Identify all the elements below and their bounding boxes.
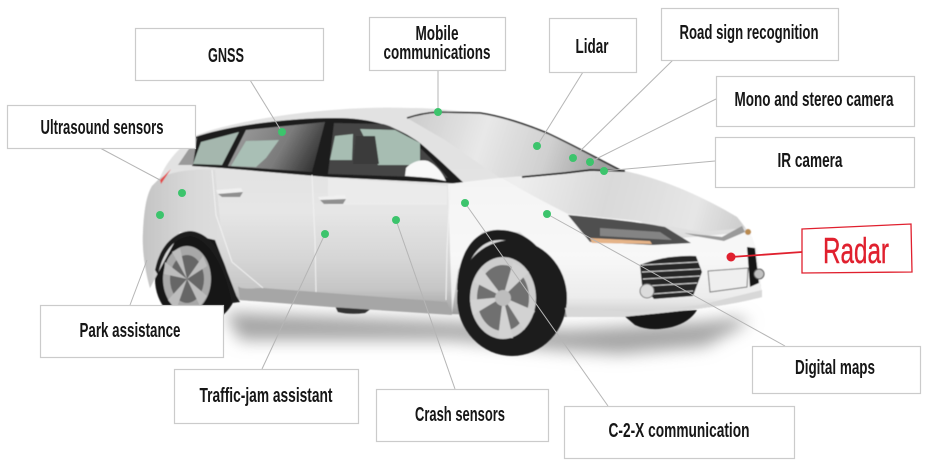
label: Mono and stereo camera (716, 76, 914, 126)
car illustration (143, 108, 764, 356)
front wheel (457, 240, 567, 356)
label: Mobile communications: Mobile (416, 22, 458, 45)
label: Ultrasound sensors: Ultrasound sensors (40, 116, 164, 139)
label: Digital maps (752, 346, 920, 394)
nose trim (684, 226, 745, 241)
label: Lidar (550, 18, 636, 72)
right vent (747, 247, 759, 287)
rear wheel arch (155, 231, 240, 303)
label: Road sign recognition: Road sign recognition (680, 21, 818, 44)
front fender and bumper (448, 176, 762, 317)
headlight highlights (600, 228, 672, 240)
connector lines (100, 60, 785, 406)
license plate (708, 268, 748, 292)
label: Park assistance (40, 306, 224, 358)
front wheel arch (457, 230, 565, 314)
label: Radar (802, 224, 912, 273)
label: Crash sensors: Crash sensors (415, 403, 505, 426)
front side window (328, 123, 448, 178)
grille (640, 256, 702, 299)
sill (238, 286, 452, 315)
sensor dots (156, 108, 608, 238)
front lower wheel (622, 310, 697, 329)
label: Lidar: Lidar (576, 35, 609, 58)
label: GNSS (136, 28, 324, 80)
label: IR camera: IR camera (778, 149, 843, 172)
rear quarter shading (143, 169, 222, 288)
radar line and dot (726, 252, 802, 262)
window frame (192, 118, 465, 184)
windshield (407, 112, 620, 178)
underbody (335, 306, 372, 314)
label: Mobile communications: communications (384, 41, 490, 64)
label: IR camera (716, 138, 914, 188)
label: Mobile communications (370, 18, 506, 70)
label: Traffic-jam assistant: Traffic-jam assistant (200, 384, 333, 407)
rear window (193, 132, 239, 165)
headlight (568, 215, 691, 245)
bumper lip (565, 290, 762, 317)
fog lamps (640, 269, 764, 298)
seat (353, 136, 379, 164)
rear window reflection (231, 140, 279, 167)
label: Digital maps: Digital maps (795, 356, 875, 379)
windshield top edge (407, 112, 620, 170)
front window reflection (330, 129, 420, 165)
wipers (522, 170, 625, 177)
ground shadow (225, 312, 750, 354)
rear pillar (178, 137, 197, 165)
mirror (405, 160, 446, 181)
label: C-2-X communication: C-2-X communication (608, 419, 750, 442)
headlight amber (590, 238, 652, 244)
door handles (216, 188, 346, 204)
car body (143, 108, 762, 317)
label: Park assistance: Park assistance (80, 319, 180, 342)
label: C-2-X communication (564, 406, 794, 458)
front door highlight (328, 178, 447, 205)
label: Road sign recognition (662, 8, 838, 60)
label: Radar: Radar (823, 230, 889, 271)
label: Crash sensors (376, 390, 548, 442)
rear side window (228, 122, 325, 172)
hood (502, 170, 745, 232)
label: Ultrasound sensors (8, 106, 196, 148)
amber indicator (745, 229, 751, 235)
rear wheel (155, 233, 239, 325)
label: GNSS: GNSS (208, 44, 244, 67)
door seams (212, 170, 450, 300)
label: Traffic-jam assistant (174, 370, 358, 424)
tail light (160, 169, 171, 184)
